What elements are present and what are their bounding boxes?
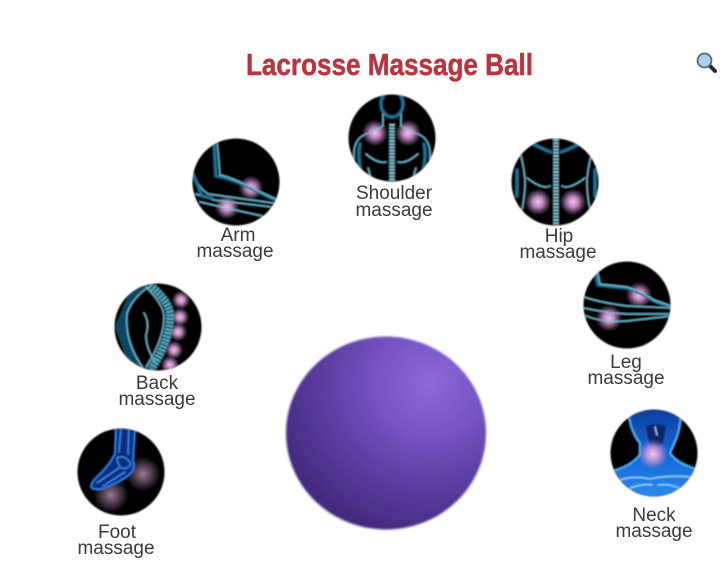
label: neck massage — [615, 505, 693, 542]
label: arm massage: Arm — [221, 225, 255, 246]
label: neck massage: massage — [615, 521, 693, 542]
label: arm massage: massage — [196, 241, 274, 262]
icon: neck — [610, 409, 698, 497]
icon: hip — [512, 138, 598, 226]
label: shoulder massage: Shoulder — [356, 183, 433, 204]
label: back massage: Back — [136, 373, 179, 394]
icon: arm — [192, 138, 280, 226]
label: foot massage — [77, 522, 155, 559]
title: Lacrosse Massage Ball — [246, 47, 533, 82]
panel: leg massage — [584, 262, 671, 389]
label: foot massage: massage — [77, 538, 155, 559]
label: neck massage: Neck — [632, 505, 676, 526]
label: back massage — [118, 373, 196, 410]
label: shoulder massage — [355, 183, 433, 221]
panel: hip massage — [512, 138, 598, 263]
panel: neck massage — [610, 409, 698, 542]
label: shoulder massage: massage — [355, 200, 433, 221]
icon: leg — [584, 262, 671, 348]
label: back massage: massage — [118, 389, 196, 410]
panel: back massage — [114, 283, 202, 410]
panel: shoulder massage — [348, 91, 436, 221]
label: hip massage — [519, 226, 597, 263]
label: leg massage — [587, 352, 665, 389]
icon: shoulder — [348, 91, 436, 182]
icon: foot — [78, 428, 164, 516]
icon: back — [114, 283, 202, 374]
label: leg massage: Leg — [610, 352, 642, 373]
panel: arm massage — [192, 138, 280, 262]
label: hip massage: massage — [519, 242, 597, 263]
label: leg massage: massage — [587, 368, 665, 389]
panel: foot massage — [77, 428, 164, 559]
icon: magnifying glass — [698, 54, 715, 71]
label: foot massage: Foot — [98, 522, 137, 543]
label: hip massage: Hip — [545, 226, 573, 247]
ball — [286, 336, 486, 530]
label: arm massage — [196, 225, 274, 262]
